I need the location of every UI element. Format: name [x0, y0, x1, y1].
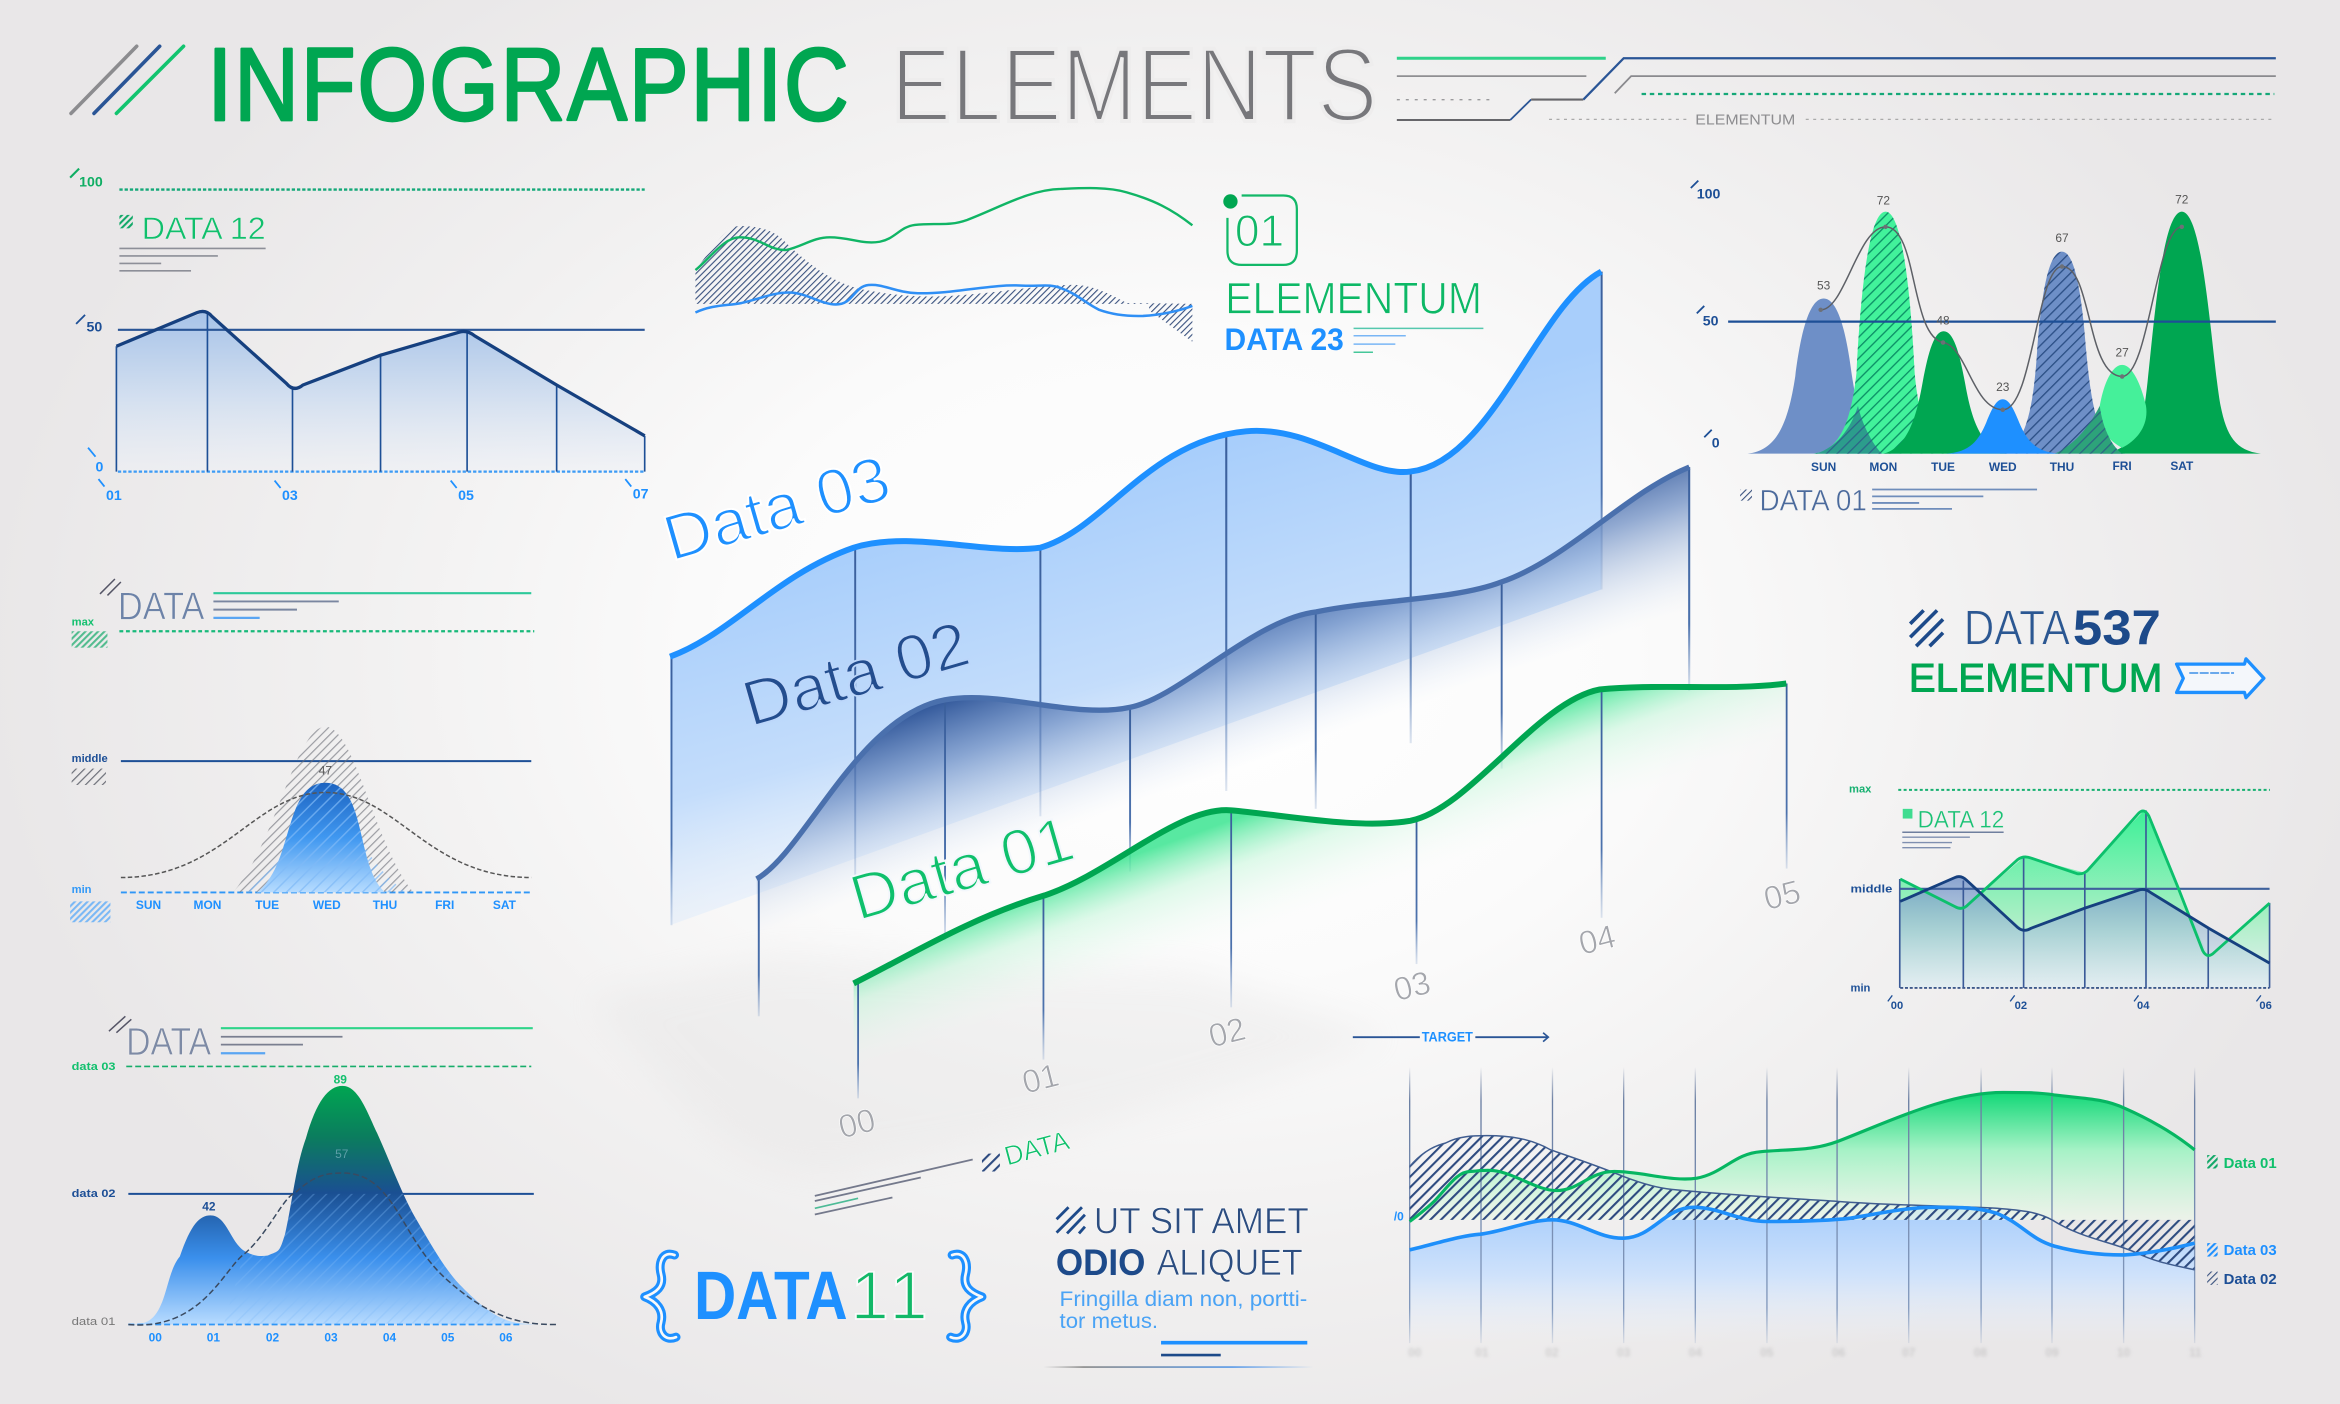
callout: data 537 elementum [1909, 601, 2264, 701]
day labels: THU [2050, 460, 2074, 474]
overlap: sun mon [1816, 406, 1882, 454]
blurred axis labels: 08 [1974, 1346, 1987, 1360]
bell: fri [2099, 365, 2146, 448]
panel: mountain chart data: 05 [441, 1331, 455, 1345]
axis labels: 0 [96, 460, 104, 476]
axis labels: 07 [633, 486, 649, 502]
axis labels: 0 [1712, 436, 1720, 452]
legend: Data 01 [2224, 1155, 2277, 1172]
number: 537: 537 [2073, 601, 2161, 656]
main chart [656, 272, 1804, 1179]
day labels: SAT [2170, 459, 2194, 473]
axis labels: 00 [835, 1101, 879, 1145]
green area [1410, 1092, 2195, 1221]
arrow: target: TARGET [1422, 1030, 1474, 1045]
icon: 01 badge: 01 [1235, 206, 1284, 256]
labels: 47 [319, 764, 332, 778]
day labels: FRI [2113, 459, 2132, 473]
legend [2207, 1155, 2277, 1288]
panel: small two series chart: 06 [2259, 1000, 2272, 1012]
panel: bell chart data days: max [72, 616, 95, 628]
day labels [1811, 459, 2194, 474]
blurred axis labels: 02 [1545, 1346, 1559, 1360]
blurred axis labels: 09 [2045, 1346, 2059, 1360]
value labels: 72 [1877, 193, 1890, 207]
axis labels: 01 [1018, 1056, 1063, 1101]
blurred axis labels: 10 [2117, 1346, 2131, 1360]
value labels: 27 [2115, 346, 2129, 360]
bell: wed [1946, 399, 2059, 454]
day labels: MON [194, 898, 221, 912]
overlap: thu fri [2055, 406, 2122, 454]
heading line two: ALIQUET [1157, 1241, 1303, 1283]
text: data 537: DATA [1964, 601, 2070, 656]
mountain area [128, 1086, 536, 1324]
panel: mountain chart data: 42 [202, 1199, 216, 1213]
bell: sun [1748, 298, 1900, 454]
panel: peaks chart [1691, 181, 2276, 517]
callout: slanted data [815, 1125, 1072, 1214]
label: data 02: Data 02 [735, 607, 977, 740]
value labels [1817, 193, 2189, 394]
legend: Data 03 [2224, 1242, 2277, 1259]
text block: ut sit amet [1043, 1199, 1313, 1368]
callout: slanted data: DATA [1001, 1125, 1072, 1171]
axis labels [835, 872, 1804, 1145]
green area [1900, 810, 2270, 988]
text: elementum: ELEMENTUM [1225, 273, 1482, 323]
area fill [116, 312, 645, 472]
blurred axis labels: 03 [1617, 1346, 1631, 1360]
axis labels: 01 [106, 488, 122, 504]
panel: small trend chart [695, 188, 1192, 342]
text: elementum: ELEMENTUM [1909, 656, 2162, 701]
icon: right brace [951, 1254, 982, 1338]
body text: Fringilla diam non, portti- [1060, 1288, 1307, 1311]
hatched area [1410, 1136, 2195, 1270]
grid lines [1410, 1067, 2195, 1343]
green line [1410, 1092, 2195, 1221]
icon: title slashes [71, 46, 184, 113]
panel: mountain chart data: 04 [383, 1331, 397, 1345]
heading: data [109, 1016, 533, 1064]
axis labels [72, 1061, 116, 1328]
blurred axis labels: 00 [1408, 1346, 1422, 1360]
blurred axis labels: 07 [1902, 1346, 1916, 1360]
blue peak [257, 783, 385, 892]
navy line [1900, 877, 2270, 963]
day labels: MON [1869, 460, 1897, 474]
day labels: TUE [255, 898, 279, 912]
text: data 23: DATA 23 [1224, 322, 1344, 357]
day labels: WED [313, 898, 341, 912]
value labels: 48 [1936, 314, 1950, 328]
axis labels [70, 169, 649, 504]
heading: data: DATA [126, 1021, 211, 1064]
icon: 01 badge [1223, 194, 1297, 265]
day labels: SAT [493, 898, 517, 912]
axis labels: 03 [282, 488, 298, 504]
axis labels: 05 [458, 488, 474, 504]
icon: hatch [1910, 610, 1943, 646]
panel: mountain chart data [72, 1016, 557, 1345]
icon: hatch [1057, 1207, 1085, 1233]
dashed bell curve [128, 1173, 557, 1325]
callout: 01 elementum data 23 [1223, 194, 1483, 357]
hatched bell [233, 727, 413, 892]
axis labels: 05 [1760, 872, 1804, 917]
heading: data: DATA [118, 585, 205, 628]
blurred axis labels: 04 [1689, 1346, 1702, 1360]
blurred axis labels: 11 [2189, 1346, 2202, 1360]
bell: thu [2000, 252, 2125, 454]
value labels: 89 [334, 1072, 347, 1086]
axis labels [1849, 783, 1892, 995]
panel: small two series chart: 04 [2137, 1000, 2150, 1012]
bell: tue [1883, 331, 2006, 454]
blue line [695, 285, 1192, 316]
blue area [1410, 1207, 2195, 1343]
line [116, 311, 645, 436]
day labels: FRI [435, 898, 454, 912]
label: data 03: Data 03 [656, 442, 898, 575]
blurred axis labels: 01 [1475, 1346, 1489, 1360]
zero label: /0 [1394, 1210, 1404, 1224]
header circuit lines [1397, 58, 2276, 129]
value labels: 67 [2055, 231, 2069, 245]
heading: data 01: DATA 01 [1759, 484, 1867, 517]
panel: mountain chart data: 57 [335, 1147, 349, 1161]
day labels: SUN [136, 898, 161, 912]
panel: mountain chart data: 02 [266, 1331, 280, 1345]
navy area [1900, 876, 2270, 988]
legend: Data 02 [2224, 1271, 2277, 1288]
arrow: target [1353, 1030, 1548, 1045]
panel: mountain chart data: 06 [499, 1331, 513, 1345]
axis labels: 50 [1703, 313, 1719, 329]
axis labels: data 02 [72, 1188, 116, 1200]
green line [695, 188, 1192, 270]
value labels: 23 [1996, 380, 2010, 394]
heading: data 12 [119, 211, 266, 271]
label: data 01: Data 01 [842, 802, 1081, 934]
heading: data 01 [1740, 484, 2037, 517]
number: 11: 11 [851, 1257, 928, 1334]
heading: data 12: DATA 12 [1918, 807, 2004, 834]
blurred axis labels: 05 [1760, 1346, 1774, 1360]
heading: data 12 [1902, 807, 2004, 848]
panel: line chart data 12 [70, 169, 649, 504]
axis labels: max [1849, 783, 1872, 795]
legend hatches [72, 631, 107, 648]
heading: data 12: DATA 12 [142, 211, 266, 246]
panel: small two series chart [1849, 783, 2272, 1012]
axis labels [1691, 181, 1721, 452]
axis labels: 100 [79, 175, 103, 191]
blurred axis labels: 06 [1832, 1346, 1846, 1360]
series: data 02 [735, 467, 1690, 1016]
axis labels: middle [1851, 883, 1892, 895]
bell: sat [2103, 212, 2261, 454]
mountain hatch [224, 1194, 516, 1324]
icon: left brace [645, 1254, 676, 1338]
day labels [136, 898, 517, 912]
value labels: 72 [2175, 193, 2189, 207]
heading line two bold: ODIO [1056, 1241, 1145, 1283]
heading line one: UT SIT AMET [1094, 1199, 1309, 1241]
axis labels: data 03 [72, 1061, 116, 1073]
panel: bell chart data days: middle [72, 753, 108, 765]
heading: data [100, 579, 531, 628]
blurred axis labels [1408, 1346, 2202, 1360]
panel: small two series chart: 00 [1891, 1000, 1903, 1012]
value labels: 53 [1817, 279, 1831, 293]
panel: mountain chart data: 01 [207, 1331, 220, 1345]
blue hatched base [239, 828, 406, 892]
day labels: SUN [1811, 460, 1836, 474]
panel: bell chart data days: min [72, 884, 92, 896]
icon: arrow [2177, 659, 2264, 698]
panel: area chart bottom right [1394, 1067, 2277, 1360]
panel: bell chart data days [70, 579, 534, 922]
axis labels: 03 [1390, 963, 1434, 1008]
dashed bell curve [121, 792, 531, 878]
title: infographic: INFOGRAPHIC [207, 27, 851, 142]
axis labels: 04 [1575, 917, 1619, 962]
axis labels: data 01 [72, 1316, 116, 1328]
trend line [1821, 227, 2182, 410]
axis labels: 02 [1205, 1010, 1249, 1054]
axis labels: min [1851, 983, 1871, 995]
bell: mon [1813, 212, 1958, 454]
callout: data 11 [645, 1254, 982, 1338]
axis labels: 100 [1697, 186, 1721, 202]
header label: ELEMENTUM [1695, 112, 1795, 129]
hatched area [695, 226, 1192, 342]
day labels: THU [373, 898, 397, 912]
axis labels: 50 [87, 319, 102, 335]
series: data 01 [842, 683, 1788, 1179]
title: elements: ELEMENTS [891, 27, 1377, 144]
green line [1900, 811, 2270, 956]
body text [1060, 1288, 1307, 1333]
day labels: WED [1989, 460, 2017, 474]
text: data 11: DATA [694, 1257, 848, 1334]
panel: mountain chart data: 03 [324, 1331, 338, 1345]
panel: small two series chart: 02 [2015, 1000, 2027, 1012]
panel: mountain chart data: 00 [149, 1331, 162, 1345]
title [71, 27, 1377, 144]
body text: tor metus. [1060, 1310, 1158, 1333]
day labels: TUE [1931, 460, 1955, 474]
series: data 03 [656, 272, 1603, 925]
blue line [1410, 1207, 2195, 1255]
